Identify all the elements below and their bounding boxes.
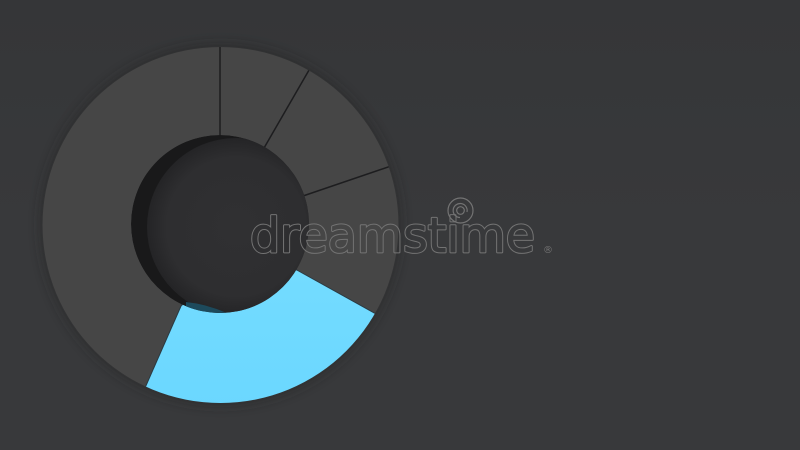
hole floor (147, 138, 309, 313)
donut chart (42, 47, 398, 403)
watermark spiral icon (448, 198, 473, 223)
dark ring segments (42, 47, 398, 403)
watermark (251, 197, 552, 254)
segment: blue highlighted (146, 270, 375, 403)
ring shadow (42, 46, 400, 404)
donut hole (131, 135, 309, 313)
infographic canvas (41, 43, 552, 404)
segment dividers (141, 40, 392, 397)
watermark registered mark: ® (543, 245, 553, 256)
segments and dividers clipped to ring (145, 47, 389, 403)
watermark wordmark: dreamstime (250, 208, 535, 264)
blue reflection (186, 302, 226, 313)
hole shadow crescent (131, 135, 309, 313)
